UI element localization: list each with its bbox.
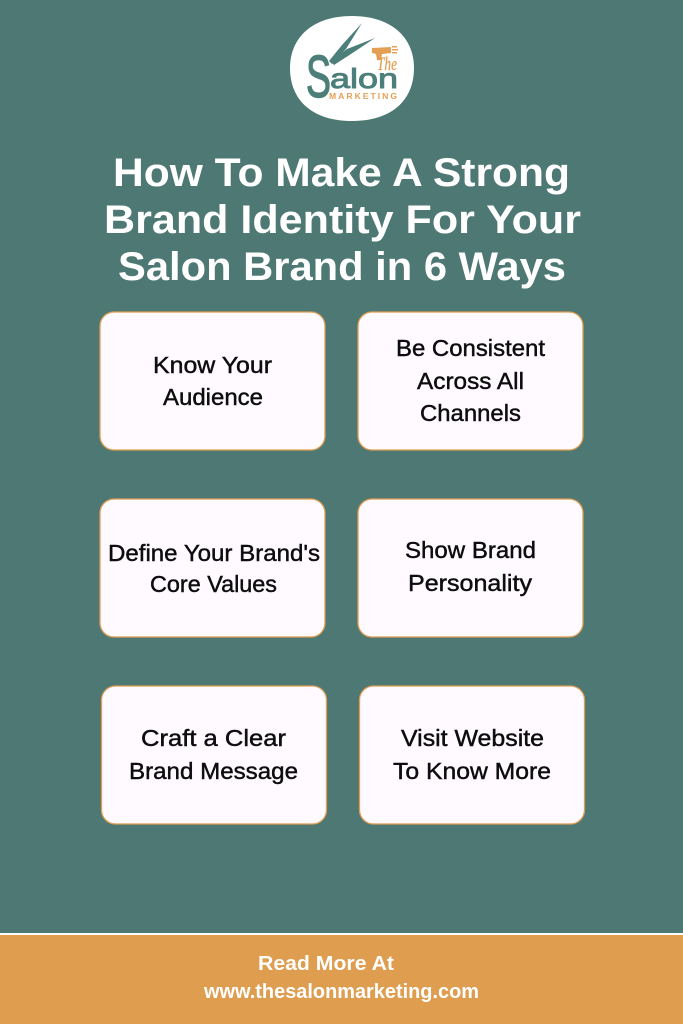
footer text [203,953,479,1003]
card: brand personality: Personality [408,570,532,596]
card: brand personality: Show Brand [405,537,536,563]
logo script word: The: The [377,54,397,75]
logo [290,16,414,121]
card: be consistent: Channels [420,400,521,426]
footer text: Read More At [258,953,394,975]
logo word: Marketing: MARKETING [329,91,397,101]
card: be consistent: Be Consistent [396,335,545,361]
card: brand personality [358,499,583,637]
logo badge [290,16,414,121]
logo word: Salon [306,44,398,110]
card: visit website: To Know More [393,758,551,784]
card: know your audience: Audience [163,384,263,410]
card: brand message: Brand Message [129,758,298,784]
title: Salon Brand in 6 Ways [118,245,566,289]
card: be consistent: Across All [417,368,524,394]
card: brand message [102,686,326,824]
footer text: www.thesalonmarketing.com [203,981,479,1003]
title: How To Make A Strong [113,151,570,195]
logo word: Salon: S [306,44,331,110]
icon: hair dryer [372,46,398,60]
card: be consistent [358,312,583,450]
card: core values [100,499,325,637]
footer band [0,933,683,1024]
icon: scissors [329,23,375,65]
logo word: Salon: alon [330,63,398,94]
card: visit website [360,686,584,824]
card: brand message: Craft a Clear [141,725,286,751]
card: know your audience [100,312,325,450]
title: Brand Identity For Your [104,198,581,242]
card: know your audience: Know Your [153,352,272,378]
card: visit website: Visit Website [401,725,544,751]
title [104,151,581,289]
card: core values: Define Your Brand's [108,540,320,566]
card: core values: Core Values [150,571,277,597]
